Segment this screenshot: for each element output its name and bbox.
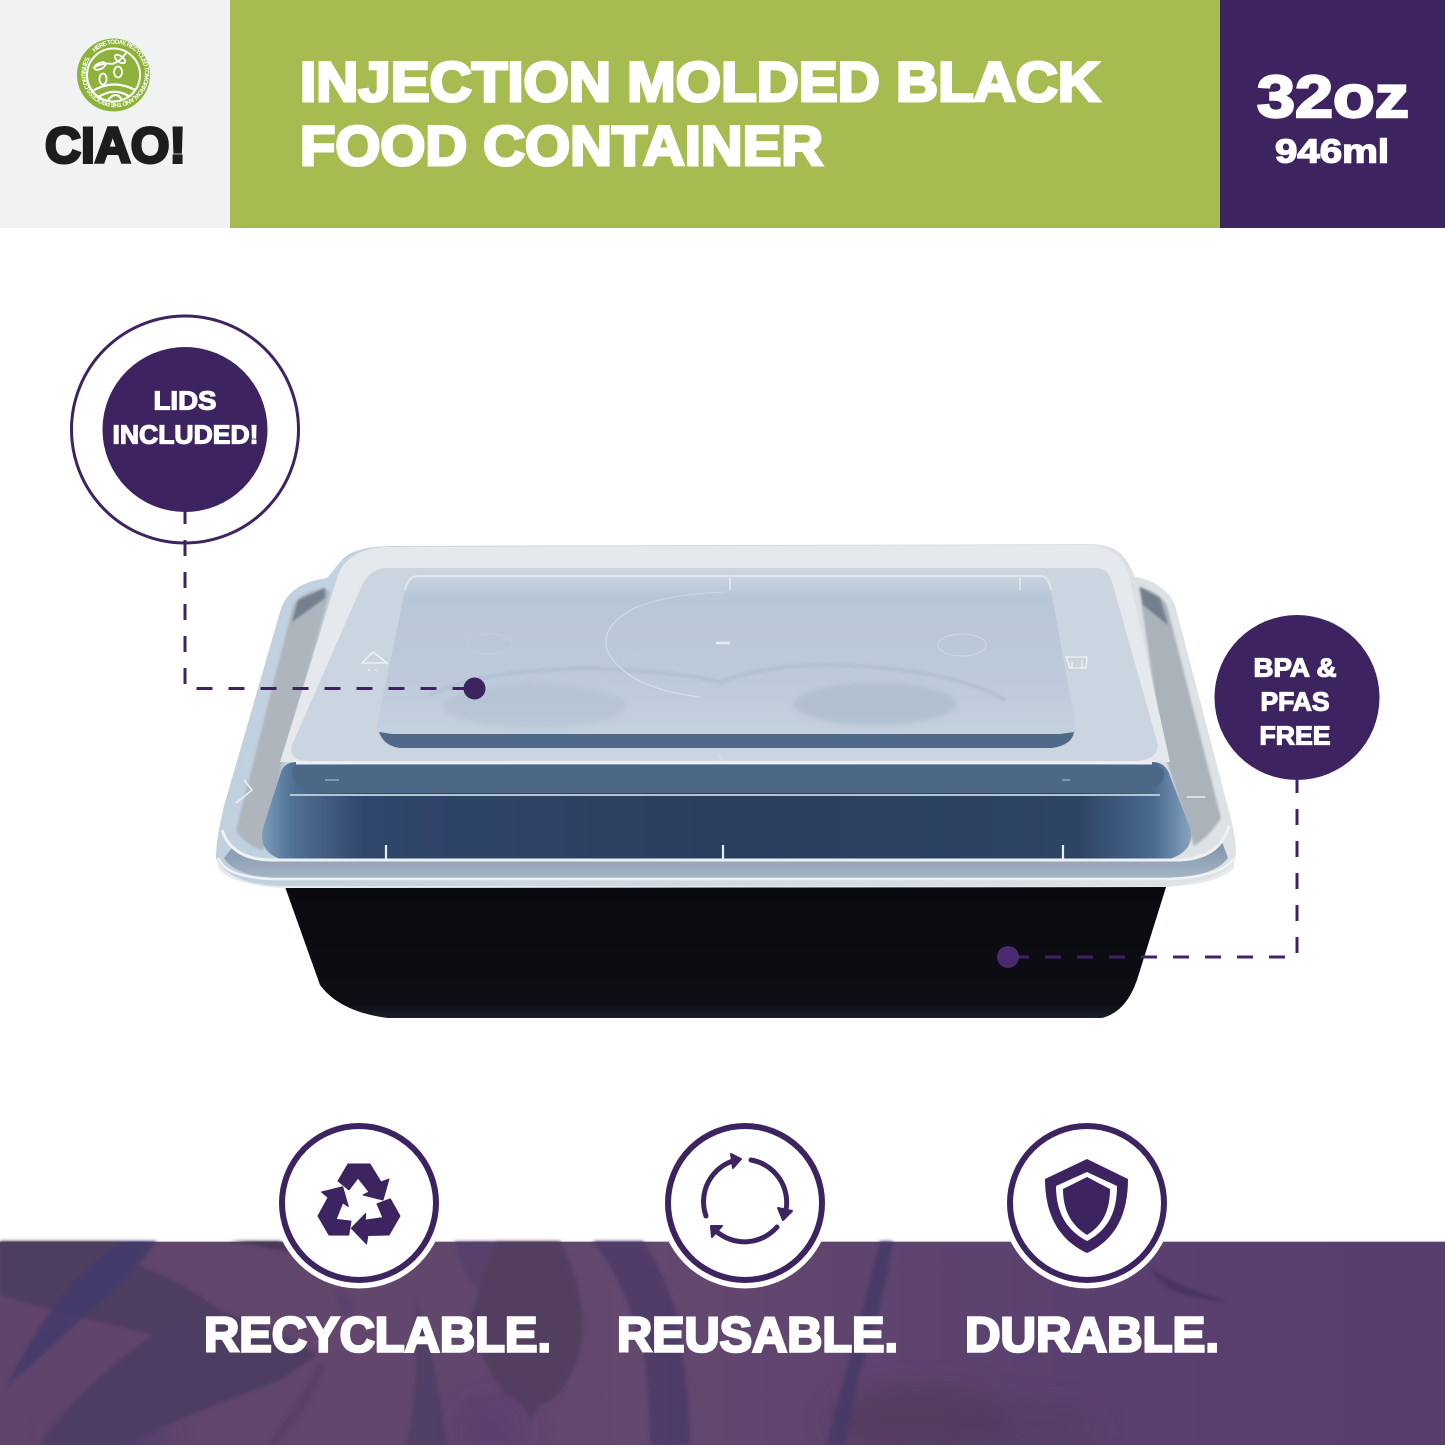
lid top outer band [280,545,1170,762]
wordmark: CIAO!: CIAO! [45,118,186,174]
icon: recyclable [274,1118,444,1288]
lid lower wall [262,762,1191,859]
size label: 946ml [1275,132,1389,170]
callout anchor dot: lids [464,678,486,700]
lid rim band [224,842,1228,878]
callout line: BPA free [1016,780,1297,957]
panel: header title background [230,0,1220,228]
callout: BPA and PFAS free [1214,615,1380,780]
callout line: lids [185,512,468,688]
icon: embossed cup mark [1066,657,1087,668]
tray side channel right [1139,587,1221,846]
plate edge [379,732,1074,748]
reflection on rim corners [236,780,252,803]
emboss number: 3 [718,754,723,764]
lid wall highlight [290,794,1160,796]
size label: 32oz [1257,64,1409,130]
lid blue band [292,765,1164,793]
rim tick marks [386,845,1063,860]
callout anchor dot: BPA free [997,946,1019,968]
lid shelf [291,568,1158,761]
channel shading [292,587,1168,625]
icon: embossed recycle mark [362,652,387,670]
callout: lids included: INCLUDED! [112,420,258,450]
title: FOOD CONTAINER [300,114,823,177]
icon: green round badge: HERE TODAY, RECYCLED TOMORROW, AND THE PROCESS CONTINUES. [81,40,150,108]
container black base [284,884,1167,1018]
rim highlights [222,826,1229,860]
callout: BPA and PFAS free: PFAS [1260,686,1330,716]
clear lid silhouette [216,544,1236,888]
panel: header size background [1220,0,1445,228]
icon: durable [1002,1118,1172,1288]
label: reusable: REUSABLE. [617,1308,898,1363]
logo: CIAO! badge and wordmark [45,38,186,174]
callout: BPA and PFAS free: FREE [1260,720,1330,750]
label: recyclable: RECYCLABLE. [204,1308,551,1363]
panel: header logo background [0,0,230,228]
panel: purple footer band with leaves [0,1241,1445,1445]
tray side channel left [236,588,330,850]
size label [1257,64,1409,170]
callout: BPA and PFAS free: BPA & [1254,652,1336,682]
callout: lids included: LIDS [154,386,216,416]
product photo: food container [216,544,1236,1018]
lid dimples and embossing [362,575,1087,728]
title: INJECTION MOLDED BLACK [300,50,1100,113]
title [300,50,1100,177]
label: durable: DURABLE. [965,1308,1219,1363]
callout: lids included [72,316,298,543]
icon: reusable [660,1118,830,1288]
lid top plate [377,575,1076,748]
